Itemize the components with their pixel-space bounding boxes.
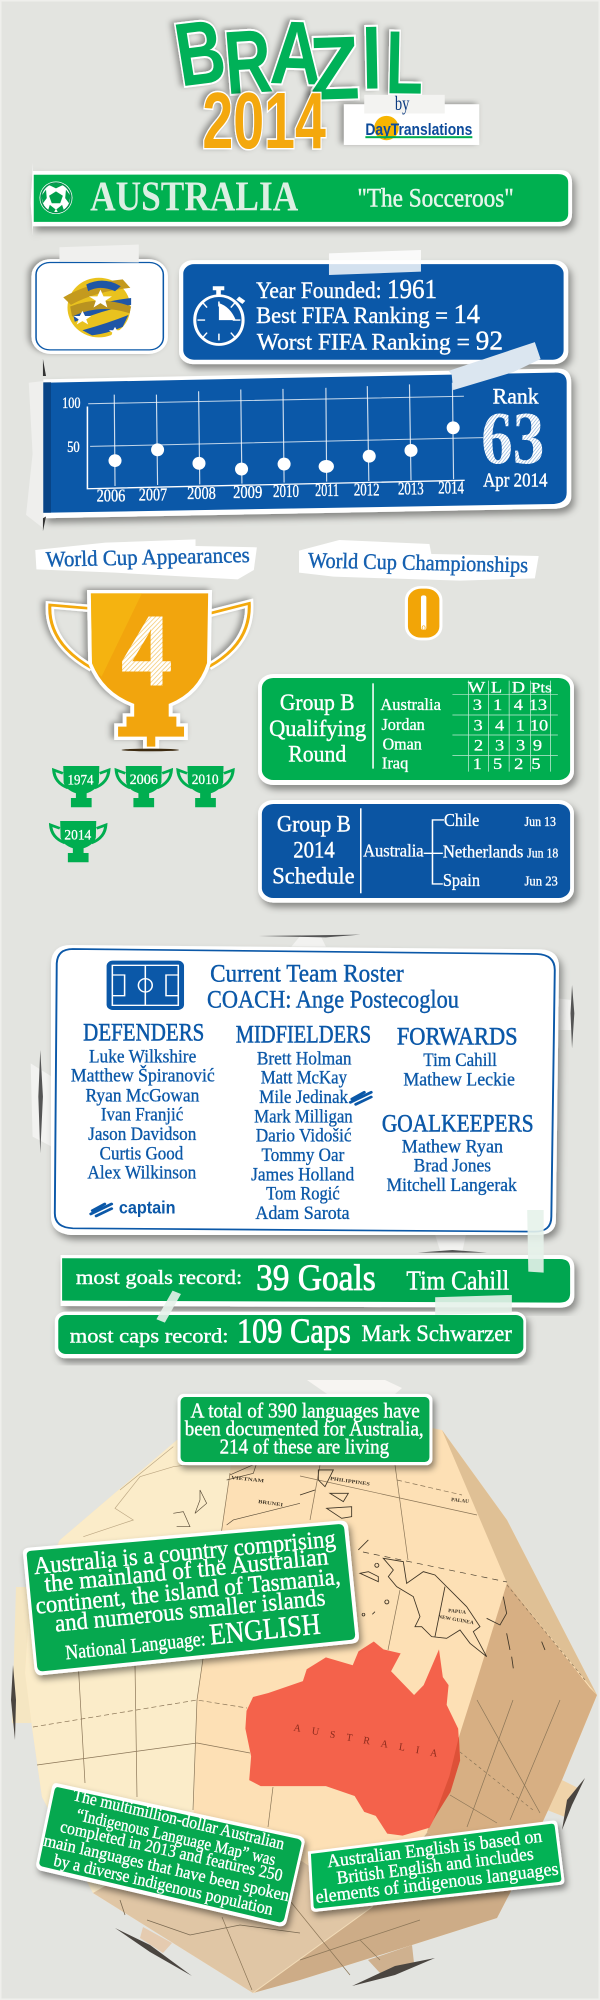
callout: 390 languages: A total of 390 languages have (191, 1400, 420, 1423)
panel: Group B qualifying (258, 674, 574, 785)
list: defenders: DEFENDERS (83, 1018, 204, 1046)
globe tabs (11, 1587, 585, 1986)
icon: pitch (107, 961, 184, 1010)
callout: country description: Australia is a country comprising (33, 1525, 337, 1580)
list: goalkeepers: GOALKEEPERS (382, 1109, 534, 1137)
list: midfielders: Dario Vidošić (256, 1124, 352, 1146)
heading: World Cup Appearances: World Cup Appearances (45, 543, 250, 572)
chart axis labels: 50 (67, 438, 80, 456)
callout: country description (23, 1521, 359, 1675)
panel title: 2014 (293, 838, 335, 863)
callout: 390 languages: been documented for Australia, (185, 1418, 424, 1441)
list: midfielders: Tom Rogić (266, 1182, 340, 1204)
rank callout: 63 (481, 397, 544, 480)
list: defenders: Matthew Špiranović (71, 1064, 215, 1086)
list: midfielders: Brett Holman (257, 1047, 352, 1069)
panel title: Qualifying (269, 716, 367, 742)
standings table: 1 (473, 755, 482, 773)
chart axis labels: 2011 (315, 481, 339, 501)
callout: 390 languages (178, 1394, 432, 1465)
callout: Australian English: Australian English is based on (326, 1825, 543, 1871)
chart axis labels: 2006 (97, 486, 125, 506)
nickname: "The Socceroos" (357, 184, 514, 213)
fixtures: Spain (443, 871, 480, 891)
legend: captain (91, 1198, 176, 1217)
callout: indigenous language map: completed in 2013 and features 250 (59, 1817, 284, 1885)
callout: Australian English (308, 1820, 564, 1912)
team names: Jordan (381, 715, 425, 735)
icon: mini trophy 2006: 2006 (130, 772, 158, 788)
logo card: DayTranslations: DayTranslations (365, 120, 472, 139)
list: defenders: Ivan Franjić (101, 1103, 183, 1125)
map labels: NEW GUINEA (438, 1615, 474, 1626)
globe bottom faces (93, 1860, 372, 1993)
championships count (406, 587, 441, 639)
team names: Oman (383, 734, 422, 754)
map globe (11, 1380, 597, 1993)
standings table: 13 (529, 696, 547, 714)
callout: Australian English: elements of indigenous languages (315, 1858, 559, 1907)
facts text: Worst FIFA Ranking = 92 (257, 326, 503, 356)
coastlines: Philippines and New Guinea (300, 1470, 545, 1668)
standings table: 9 (533, 737, 542, 754)
chart axis labels: 2008 (187, 484, 216, 504)
rank callout: Apr 2014 (483, 469, 548, 491)
tape (329, 250, 421, 275)
tape strips (156, 1210, 544, 1323)
list: defenders: Jason Davidson (88, 1122, 197, 1145)
title: BRAZIL: B (168, 1, 232, 106)
map labels: PHILIPPINES (330, 1477, 370, 1488)
fixtures: Jun 23 (524, 874, 558, 889)
facts text (256, 275, 503, 356)
chart axis labels: 2014 (438, 479, 464, 498)
section: language callouts (23, 1394, 564, 1926)
standings table: W (468, 678, 486, 696)
icon: socceroos emblem (63, 278, 131, 337)
tape (449, 342, 541, 390)
title: BRAZIL: L (385, 13, 424, 113)
standings table: 1 (516, 717, 525, 734)
roster heading: COACH: Ange Postecoglou (207, 985, 459, 1013)
roster heading (207, 959, 459, 1013)
team names (380, 695, 442, 773)
map labels (231, 1476, 474, 1626)
title: BRAZIL: Z (307, 18, 361, 120)
list: midfielders (236, 1020, 371, 1224)
panel title (272, 812, 355, 889)
panel: team roster (51, 945, 559, 1235)
list: defenders: Curtis Good (100, 1142, 184, 1164)
standings table: 1 (493, 696, 502, 714)
chart axis labels: 2007 (139, 486, 167, 505)
fixtures: Jun 18 (527, 846, 558, 861)
panel: team facts (179, 250, 568, 364)
callout: country description: and numerous smaller islands (54, 1584, 326, 1638)
panel title: Schedule (272, 864, 355, 889)
section: header and chart (26, 1, 572, 531)
standings table: D (512, 678, 525, 696)
panel title: Round (288, 742, 347, 767)
standings table: 3 (473, 717, 483, 734)
icon: stopwatch (195, 288, 244, 344)
coastline: south (120, 1900, 300, 1935)
icon: mini trophy 2006 (116, 766, 171, 807)
icon: mini trophy 1974: 1974 (67, 773, 94, 788)
icon: mini trophy 1974 (54, 766, 109, 807)
list: midfielders: Matt McKay (261, 1066, 347, 1088)
globe left face (25, 1412, 235, 1893)
callout: indigenous language map: by a diverse indigenous population (52, 1850, 275, 1919)
chart axis labels: 2012 (354, 481, 380, 500)
panel: most goals record (61, 1255, 574, 1308)
rank callout (481, 385, 548, 491)
map labels: BRUNEI (258, 1500, 283, 1508)
chart axis labels: 2013 (398, 480, 424, 499)
fixtures (363, 811, 558, 891)
icon: mini trophy 2014 (51, 821, 106, 862)
callout: country description: the mainland of the Australian (43, 1543, 329, 1598)
standings table: L (491, 678, 502, 696)
globe right strip (442, 1430, 597, 1695)
panel: most goals record: most goals record: (76, 1266, 242, 1289)
chart axis labels: 2009 (233, 483, 262, 503)
callout: Australian English: British English and includes (336, 1843, 535, 1888)
list: midfielders: Adam Sarota (255, 1201, 350, 1224)
championships count: 0 (422, 624, 426, 632)
list: goalkeepers: Mathew Ryan (402, 1135, 504, 1157)
standings table: 10 (530, 717, 548, 734)
heading: World Cup Appearances (35, 539, 257, 579)
callout: indigenous language map (36, 1783, 305, 1926)
standings table: 4 (514, 696, 523, 714)
list: goalkeepers: Brad Jones (414, 1154, 491, 1176)
panel title: Group B (277, 812, 351, 837)
callout: indigenous language map: The multimillion-dollar Australian (71, 1785, 287, 1854)
heading: World Cup Championships: World Cup Championships (308, 549, 528, 578)
logo card: DayTranslations (344, 92, 479, 145)
chart grid (87, 383, 483, 489)
banner: Australia (31, 163, 572, 235)
standings table: 4 (495, 717, 505, 734)
standings table (452, 678, 558, 773)
map labels: VIETNAM (231, 1476, 265, 1484)
fixtures: Chile (444, 811, 479, 831)
heading: World Cup Championships (299, 540, 539, 581)
list: midfielders: James Holland (251, 1163, 355, 1185)
chart data points (109, 421, 460, 476)
standings table: 5 (531, 755, 541, 773)
standings table: 3 (495, 737, 504, 754)
list: forwards: Tim Cahill (423, 1048, 497, 1071)
list: midfielders: Tommy Oar (261, 1143, 344, 1166)
fixtures: Netherlands (443, 843, 523, 862)
title: 2014: 2014 (202, 77, 326, 166)
standings table: 2 (514, 755, 523, 773)
panel: most caps record: most caps record: (70, 1325, 229, 1347)
tape decorations (31, 935, 574, 1253)
icon: mini trophy 2010: 2010 (192, 772, 219, 788)
panel: most goals record: Tim Cahill (406, 1266, 509, 1296)
panel: ranking chart (26, 342, 571, 531)
rank callout: Rank (493, 385, 539, 409)
banner name: AUSTRALIA (90, 173, 299, 220)
trophy number: 4 (121, 594, 171, 707)
list: forwards (397, 1022, 518, 1090)
standings table: 2 (474, 737, 483, 754)
fixtures: Australia (363, 842, 424, 861)
chart axis labels (62, 394, 464, 506)
panel: most caps record (55, 1312, 526, 1358)
list: defenders: Ryan McGowan (85, 1084, 200, 1106)
icon: soccer ball (39, 182, 72, 214)
list: goalkeepers (382, 1109, 534, 1196)
icon: big trophy (50, 592, 249, 751)
standings table: 3 (473, 696, 482, 714)
section: roster (31, 935, 574, 1358)
panel: most goals record: 39 Goals (256, 1257, 376, 1298)
roster heading: Current Team Roster (210, 959, 404, 987)
Australia landmass (245, 1641, 460, 1836)
Australia landmass: AUSTRALIA (293, 1723, 439, 1760)
callout: country description: National Language: ENGLISH (64, 1608, 322, 1666)
panel: team logo (31, 245, 168, 354)
logo card: DayTranslations: by (395, 92, 410, 115)
icon: mini trophy 2010 (178, 766, 233, 807)
panel title: Group B (280, 690, 355, 716)
globe right face (427, 1583, 597, 1893)
facts text: Year Founded: 1961 (256, 275, 437, 305)
list: midfielders: Mile Jedinak (259, 1085, 349, 1108)
title: BRAZIL (168, 1, 424, 120)
title: BRAZIL: A (268, 3, 324, 104)
list: defenders: Alex Wilkinson (87, 1161, 197, 1183)
title: BRAZIL: R (221, 11, 275, 114)
team names: Australia (380, 695, 442, 715)
panel title (269, 690, 367, 767)
list: midfielders: Mark Milligan (254, 1105, 353, 1127)
standings table: 3 (516, 737, 525, 754)
team names: Iraq (382, 753, 408, 773)
map grid (33, 1465, 585, 1990)
panel: Group B schedule (258, 800, 574, 903)
list: defenders: Luke Wilkshire (89, 1045, 196, 1067)
icon: mini trophy 2014: 2014 (64, 827, 91, 843)
facts text: Best FIFA Ranking = 14 (256, 299, 480, 329)
fixtures: Jun 13 (524, 815, 556, 830)
bracket (424, 820, 444, 884)
section: world cup (35, 539, 574, 903)
list: forwards: FORWARDS (397, 1022, 518, 1050)
panel: most caps record: Mark Schwarzer (362, 1321, 512, 1347)
list: defenders (71, 1018, 215, 1183)
chart axis labels: 2010 (273, 482, 299, 502)
panel: most caps record: 109 Caps (237, 1312, 351, 1351)
map labels: PALAU (451, 1498, 470, 1505)
list: midfielders: MIDFIELDERS (236, 1020, 371, 1048)
chart axis labels: 100 (62, 394, 81, 412)
icon: captain mark (350, 1092, 371, 1104)
map labels: PAPUA (448, 1609, 467, 1616)
callout: 390 languages: 214 of these are living (220, 1436, 389, 1458)
coastlines: Asia and Indonesia (83, 1447, 300, 1537)
title: BRAZIL: I (361, 8, 383, 108)
standings table: 5 (493, 755, 502, 773)
list: goalkeepers: Mitchell Langerak (386, 1173, 517, 1196)
legend: captain: captain (119, 1198, 176, 1217)
tape above globe (307, 1380, 402, 1396)
callout: country description: continent, the island of Tasmania, (34, 1563, 342, 1620)
callout: indigenous language map: main languages that have been spoken (42, 1831, 291, 1905)
callout: indigenous language map: “Indigenous Language Map” was (75, 1805, 278, 1869)
standings table: Pts (531, 680, 552, 696)
list: forwards: Mathew Leckie (403, 1068, 515, 1090)
globe outline (25, 1395, 597, 1993)
